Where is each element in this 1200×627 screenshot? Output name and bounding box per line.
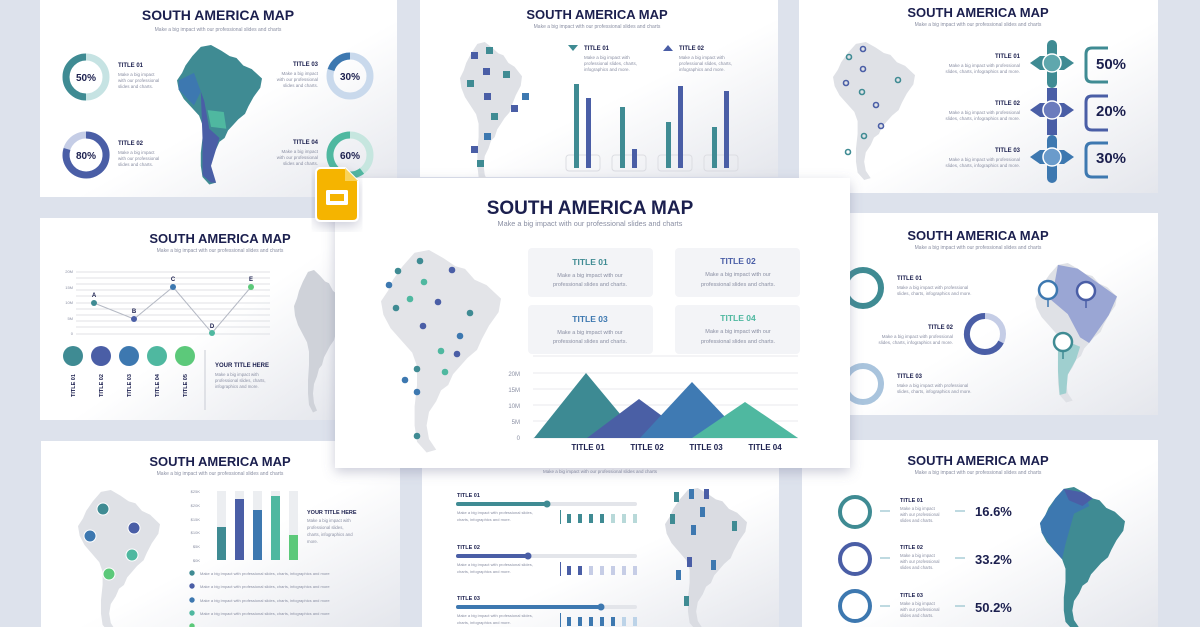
card: top-right timeline slide: Make a big impact with professional <box>949 157 1020 162</box>
card: bottom-middle progress slide: Make a big impact with professional slides, <box>457 562 533 567</box>
box title 04: professional slides and charts. <box>701 339 775 345</box>
donut 80% <box>66 135 106 175</box>
card: bottom-left bar chart slide: more. <box>307 539 318 544</box>
texts: TITLE 03 <box>293 62 319 68</box>
center map with markers <box>381 250 501 452</box>
line chart <box>91 277 254 336</box>
legend: infographics and more. <box>679 67 725 72</box>
card: middle-right pin map slide: TITLE 02 <box>928 325 954 331</box>
card: bottom-left bar chart slide: Make a big impact with professional slides, charts, infographics and more <box>200 598 330 603</box>
card: middle-left line chart slide: 20M <box>65 269 73 274</box>
legend: TITLE 01 <box>584 46 610 52</box>
texts: Make a big impact <box>118 150 155 155</box>
box title 02 <box>675 248 800 297</box>
card: middle-left line chart slide: 5M <box>67 316 73 321</box>
card: bottom-middle progress slide: Make a big impact with professional slides, <box>457 613 533 618</box>
card: bottom-middle progress slide: charts, infographics and more. <box>457 517 511 522</box>
card: top-right timeline slide: 50% <box>1096 56 1126 73</box>
bars <box>566 84 738 171</box>
box title 04: Make a big impact with our <box>705 329 771 335</box>
mountain chart: 15M <box>508 388 520 394</box>
card: bottom-left bar chart slide <box>41 441 400 627</box>
donut 80%: 80% <box>76 151 96 162</box>
bar chart: $25K <box>191 489 200 494</box>
card: top-left donut slide: Make a big impact with our professional slides and charts <box>155 27 282 33</box>
card: bottom-right percentage slide: 50.2% <box>975 600 1012 615</box>
box title 02: TITLE 02 <box>720 256 756 266</box>
card: top-right timeline slide: TITLE 03 <box>995 148 1021 154</box>
legend: Make a big impact with <box>584 55 630 60</box>
donut 50% <box>66 57 106 97</box>
texts: slides and charts. <box>118 162 153 167</box>
box title 03 <box>528 305 653 354</box>
map colored <box>177 45 262 185</box>
mountain chart: 0 <box>517 436 521 442</box>
card: top-right timeline slide: 20% <box>1096 103 1126 120</box>
card: bottom-right percentage slide: 16.6% <box>975 504 1012 519</box>
bar chart: $20K <box>191 503 200 508</box>
icon row <box>63 346 195 397</box>
legend <box>568 45 732 72</box>
texts: Make a big impact <box>281 71 319 76</box>
icon: google slides <box>316 168 358 221</box>
legend: infographics and more. <box>584 67 630 72</box>
legend: TITLE 02 <box>679 46 705 52</box>
card: middle-right pin map slide: slides, charts, infographics and more. <box>878 340 953 345</box>
card: top-left donut slide <box>40 0 397 197</box>
card: top-right timeline slide: slides, charts, infographics and more. <box>945 163 1020 168</box>
card: bottom-middle progress slide: TITLE 01 <box>457 493 480 499</box>
icon row: TITLE 04 <box>155 373 161 397</box>
card: bottom-right percentage slide: 33.2% <box>975 552 1012 567</box>
texts: with our professional <box>277 77 318 82</box>
card: top-right timeline slide: Make a big impact with our professional slides and charts <box>915 22 1042 28</box>
card: top-right timeline slide: TITLE 02 <box>995 101 1021 107</box>
icon row: TITLE 03 <box>127 374 133 397</box>
box title 03: professional slides and charts. <box>553 339 627 345</box>
center subtitle: Make a big impact with our professional slides and charts <box>498 219 683 228</box>
card: middle-left line chart slide: professional slides, charts, <box>215 378 266 383</box>
card: bottom-right percentage slide: with our professional <box>900 559 939 564</box>
card: middle-right pin map slide: Make a big impact with professional <box>897 383 968 388</box>
card: top-right timeline slide: 30% <box>1096 150 1126 167</box>
icon row: TITLE 02 <box>99 374 105 397</box>
card: middle-right pin map slide: Make a big impact with our professional slides and charts <box>915 245 1042 251</box>
card: middle-left line chart slide: 15M <box>65 285 73 290</box>
donut 50%: 50% <box>76 73 96 84</box>
mountain chart: 10M <box>508 404 520 410</box>
card: bottom-right percentage slide: slides and charts. <box>900 565 933 570</box>
card: top-right timeline slide: SOUTH AMERICA MAP <box>907 5 1049 20</box>
card: bottom-middle progress slide: TITLE 03 <box>457 596 480 602</box>
icon row: TITLE 01 <box>71 374 77 397</box>
mountain chart <box>508 356 798 452</box>
card: top-right timeline slide: TITLE 01 <box>995 54 1021 60</box>
card: top-right timeline slide: Make a big impact with professional <box>949 63 1020 68</box>
texts: slides and charts. <box>283 83 318 88</box>
donut 30% <box>330 56 370 96</box>
card: bottom-middle progress slide <box>422 468 779 627</box>
texts: Make a big impact <box>118 72 155 77</box>
center title: SOUTH AMERICA MAP <box>487 198 694 219</box>
texts: with our professional <box>118 78 159 83</box>
card: bottom-left bar chart slide: YOUR TITLE HERE <box>307 510 357 516</box>
line chart: B <box>132 309 137 315</box>
donut 30%: 30% <box>340 72 360 83</box>
card: top-right timeline slide: slides, charts, infographics and more. <box>945 69 1020 74</box>
card: top-left donut slide: SOUTH AMERICA MAP <box>142 7 294 23</box>
card: top-right timeline slide <box>799 0 1158 193</box>
donut 60%: 60% <box>340 151 360 162</box>
line chart: C <box>171 277 176 283</box>
card: bottom-right percentage slide: with our professional <box>900 512 939 517</box>
card: middle-right pin map slide: SOUTH AMERICA MAP <box>907 228 1049 243</box>
card: bottom-middle progress slide: TITLE 02 <box>457 545 480 551</box>
box title 03: TITLE 03 <box>572 314 608 324</box>
mountain chart: TITLE 03 <box>689 443 723 452</box>
card: bottom-right percentage slide: TITLE 03 <box>900 593 923 599</box>
card: bottom-right percentage slide: TITLE 01 <box>900 498 923 504</box>
card: middle-right pin map slide: Make a big impact with professional <box>897 285 968 290</box>
card: bottom-right percentage slide <box>802 440 1158 627</box>
card: bottom-right percentage slide: Make a big impact <box>900 601 936 606</box>
card: bottom-left bar chart slide: Make a big impact with professional slides, charts, infographics and more <box>200 584 330 589</box>
card: middle-left line chart slide: SOUTH AMERICA MAP <box>149 231 291 246</box>
texts: TITLE 02 <box>118 141 144 147</box>
box title 03: Make a big impact with our <box>557 330 623 336</box>
texts: slides and charts. <box>283 161 318 166</box>
card: middle-left line chart slide: YOUR TITLE HERE <box>215 363 269 369</box>
card: bottom-left bar chart slide: charts, infographics and <box>307 532 353 537</box>
legend: Make a big impact with <box>679 55 725 60</box>
card: bottom-right percentage slide: Make a big impact <box>900 506 936 511</box>
mountain chart: TITLE 02 <box>630 443 664 452</box>
bar chart: $5K <box>193 544 200 549</box>
bar chart: $0K <box>193 558 200 563</box>
card: bottom-middle progress slide: charts, infographics and more. <box>457 569 511 574</box>
card: middle-right pin map slide <box>805 213 1158 415</box>
line chart: A <box>92 293 97 299</box>
mountain chart: TITLE 01 <box>571 443 605 452</box>
bar chart: $15K <box>191 517 200 522</box>
card: top-middle bar slide: Make a big impact with our professional slides and charts <box>534 24 661 30</box>
card: bottom-left bar chart slide: professional slides, <box>307 525 344 530</box>
card: top-right timeline slide: Make a big impact with professional <box>949 110 1020 115</box>
texts: TITLE 04 <box>293 140 319 146</box>
line chart: D <box>210 324 215 330</box>
card: middle-right pin map slide: TITLE 01 <box>897 276 923 282</box>
card: bottom-right percentage slide: Make a big impact with our professional slides and charts <box>915 470 1042 476</box>
card: bottom-right percentage slide: slides and charts. <box>900 613 933 618</box>
card: bottom-left bar chart slide: Make a big impact with our professional slides and charts <box>157 471 284 477</box>
card: bottom-right percentage slide: with our professional <box>900 607 939 612</box>
card: bottom-middle progress slide: Make a big impact with professional slides, <box>457 510 533 515</box>
texts: TITLE 01 <box>118 63 144 69</box>
box title 01: Make a big impact with our <box>557 273 623 279</box>
card: top-right timeline slide: slides, charts, infographics and more. <box>945 116 1020 121</box>
mountain chart: 20M <box>508 372 520 378</box>
card: bottom-left bar chart slide: Make a big impact with professional slides, charts, infographics and more <box>200 611 330 616</box>
mountain chart: TITLE 04 <box>748 443 782 452</box>
card: middle-left line chart slide: Make a big impact with <box>215 372 259 377</box>
card: middle-left line chart slide: 10M <box>65 300 73 305</box>
card: bottom-middle progress slide: Make a big impact with our professional slides and charts <box>543 469 658 474</box>
card: top-middle bar slide <box>420 0 778 184</box>
box title 02: professional slides and charts. <box>701 282 775 288</box>
card: middle-right pin map slide: slides, charts, infographics and more. <box>897 389 972 394</box>
mountain chart: 5M <box>512 420 520 426</box>
donut 60% <box>330 135 370 175</box>
bar chart <box>191 489 298 563</box>
box title 02: Make a big impact with our <box>705 272 771 278</box>
card: bottom-left bar chart slide: SOUTH AMERICA MAP <box>149 454 291 469</box>
texts: with our professional <box>118 156 159 161</box>
card: middle-right pin map slide: TITLE 03 <box>897 374 923 380</box>
box title 01: professional slides and charts. <box>553 282 627 288</box>
line chart: E <box>249 277 253 283</box>
card: top-middle bar slide: SOUTH AMERICA MAP <box>526 7 668 22</box>
card: middle-left line chart slide: 0 <box>71 331 74 336</box>
texts: Make a big impact <box>281 149 319 154</box>
card: bottom-left bar chart slide: Make a big impact with professional slides, charts, infographics and more <box>200 571 330 576</box>
card: bottom-left bar chart slide: Make a big impact with <box>307 518 351 523</box>
box title 04 <box>675 305 800 354</box>
card: bottom-right percentage slide: Make a big impact <box>900 553 936 558</box>
card: middle-left line chart slide: Make a big impact with our professional slides and charts <box>157 248 284 254</box>
vertical timeline <box>1030 40 1074 183</box>
texts: with our professional <box>277 155 318 160</box>
card: bottom-right percentage slide: slides and charts. <box>900 518 933 523</box>
card: middle-left line chart slide <box>40 218 344 420</box>
card: bottom-right percentage slide: SOUTH AMERICA MAP <box>907 453 1049 468</box>
legend: professional slides, charts, <box>679 61 732 66</box>
box title 01: TITLE 01 <box>572 257 608 267</box>
percent brackets <box>1086 48 1108 177</box>
texts: slides and charts. <box>118 84 153 89</box>
card: middle-left line chart slide: infographics and more. <box>215 384 259 389</box>
box title 04: TITLE 04 <box>720 313 756 323</box>
card: middle-right pin map slide: slides, charts, infographics and more. <box>897 291 972 296</box>
card: middle-right pin map slide: Make a big impact with professional <box>882 334 953 339</box>
box title 01 <box>528 248 653 297</box>
bar chart: $10K <box>191 530 200 535</box>
legend: professional slides, charts, <box>584 61 637 66</box>
card: center main slide <box>335 178 850 468</box>
card: bottom-right percentage slide: TITLE 02 <box>900 545 923 551</box>
icon row: TITLE 05 <box>183 374 189 397</box>
texts <box>118 62 319 167</box>
card: bottom-middle progress slide: charts, infographics and more. <box>457 620 511 625</box>
